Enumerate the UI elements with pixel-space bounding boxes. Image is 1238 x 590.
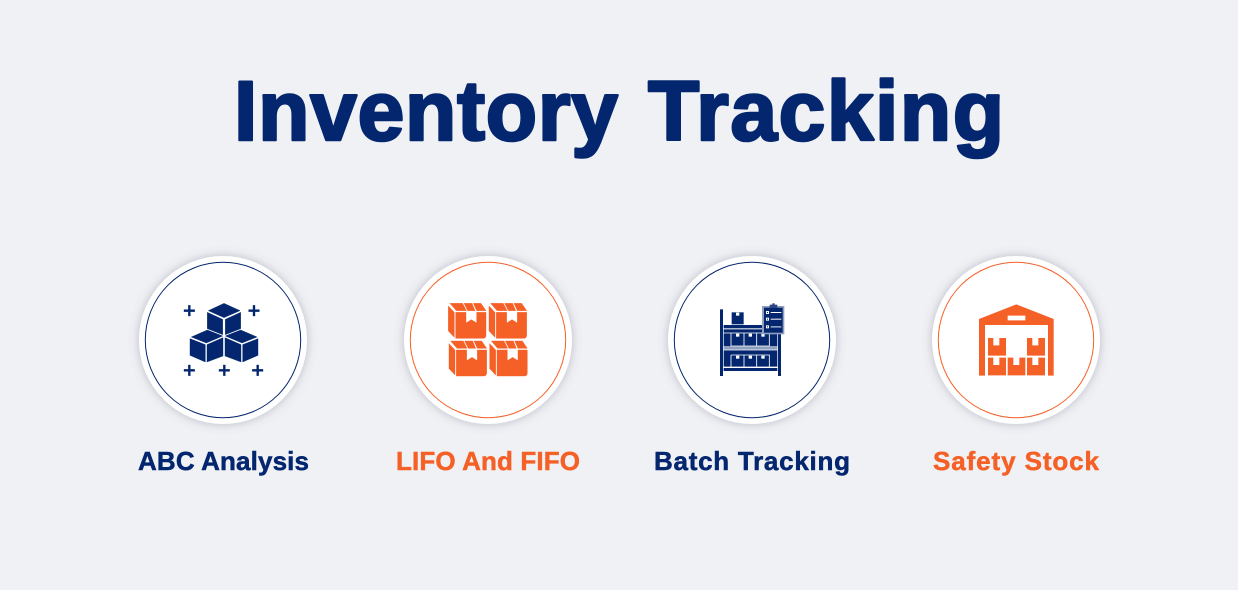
title: Inventory bbox=[234, 64, 618, 158]
panel: Safety Stock bbox=[932, 256, 1100, 476]
panel: LIFO And FIFO bbox=[396, 256, 580, 476]
label: LIFO And FIFO: LIFO And FIFO bbox=[396, 446, 580, 476]
label: ABC Analysis: ABC Analysis bbox=[138, 446, 309, 476]
circle badge: Batch Tracking bbox=[668, 256, 836, 424]
icon: four boxes bbox=[448, 303, 527, 376]
title bbox=[234, 64, 1004, 158]
label: Safety Stock: Safety Stock bbox=[933, 446, 1100, 476]
title: Tracking bbox=[648, 64, 1004, 158]
circle badge: LIFO And FIFO bbox=[404, 256, 572, 424]
icon: stacked cubes bbox=[184, 303, 263, 376]
circle badge: ABC Analysis bbox=[139, 256, 307, 424]
panel: ABC Analysis bbox=[138, 256, 309, 476]
circle badge: Safety Stock bbox=[932, 256, 1100, 424]
panel: Batch Tracking bbox=[654, 256, 850, 476]
label: Batch Tracking: Batch Tracking bbox=[654, 446, 850, 476]
icon: shelf with clipboard bbox=[720, 303, 784, 376]
icon: warehouse bbox=[979, 304, 1054, 376]
